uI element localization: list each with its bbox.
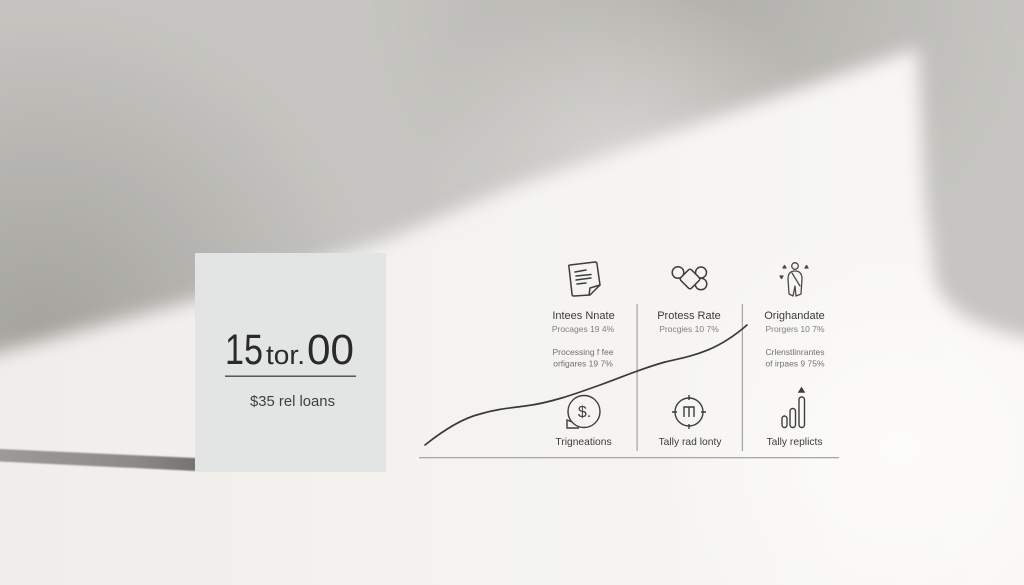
- chart baseline: [419, 457, 839, 458]
- card figure: 15: [225, 326, 263, 374]
- label: column 1: Trigneations: [555, 437, 612, 448]
- card figure: 00: [307, 326, 354, 374]
- card figure: [225, 326, 354, 374]
- note: column 1: Processing f fee: [553, 347, 614, 357]
- heading: column 1: Intees Nnate: [552, 310, 615, 322]
- note: column 3: Crlenstlinrantes: [765, 347, 825, 357]
- bottom labels: [555, 437, 823, 448]
- label: column 2: Tally rad lonty: [659, 437, 722, 448]
- stat: column 2: Procgies 10 7%: [659, 324, 719, 334]
- note: column 3: of irpaes 9 75%: [765, 358, 825, 368]
- heading: column 3: Orighandate: [764, 310, 825, 322]
- icon: person: [780, 263, 808, 296]
- column 1 text: [552, 310, 615, 368]
- cast shadow of the card: [0, 449, 196, 471]
- card caption: $35 rel loans: [250, 393, 335, 410]
- column 2 text: [657, 310, 721, 334]
- stat: column 3: Prorgers 10 7%: [765, 324, 825, 334]
- column dividers: [636, 304, 743, 451]
- heading: column 2: Protess Rate: [657, 310, 721, 322]
- icon: rising bars: [782, 388, 804, 428]
- line chart curve: [425, 325, 747, 445]
- icon: target circle: [672, 395, 706, 429]
- icon: document: [569, 262, 600, 296]
- icon: linked shapes: [672, 267, 707, 290]
- note: column 1: orfigares 19 7%: [553, 358, 613, 368]
- label: column 3: Tally replicts: [766, 437, 823, 448]
- icon: dollar coin: [567, 396, 600, 428]
- icon: dollar coin: $.: [578, 404, 591, 421]
- card rule: [225, 376, 356, 377]
- column 3 text: [764, 310, 825, 368]
- card figure: tor.: [266, 340, 305, 370]
- stat: column 1: Procages 19 4%: [552, 324, 615, 334]
- panel: loan total card: [195, 253, 386, 472]
